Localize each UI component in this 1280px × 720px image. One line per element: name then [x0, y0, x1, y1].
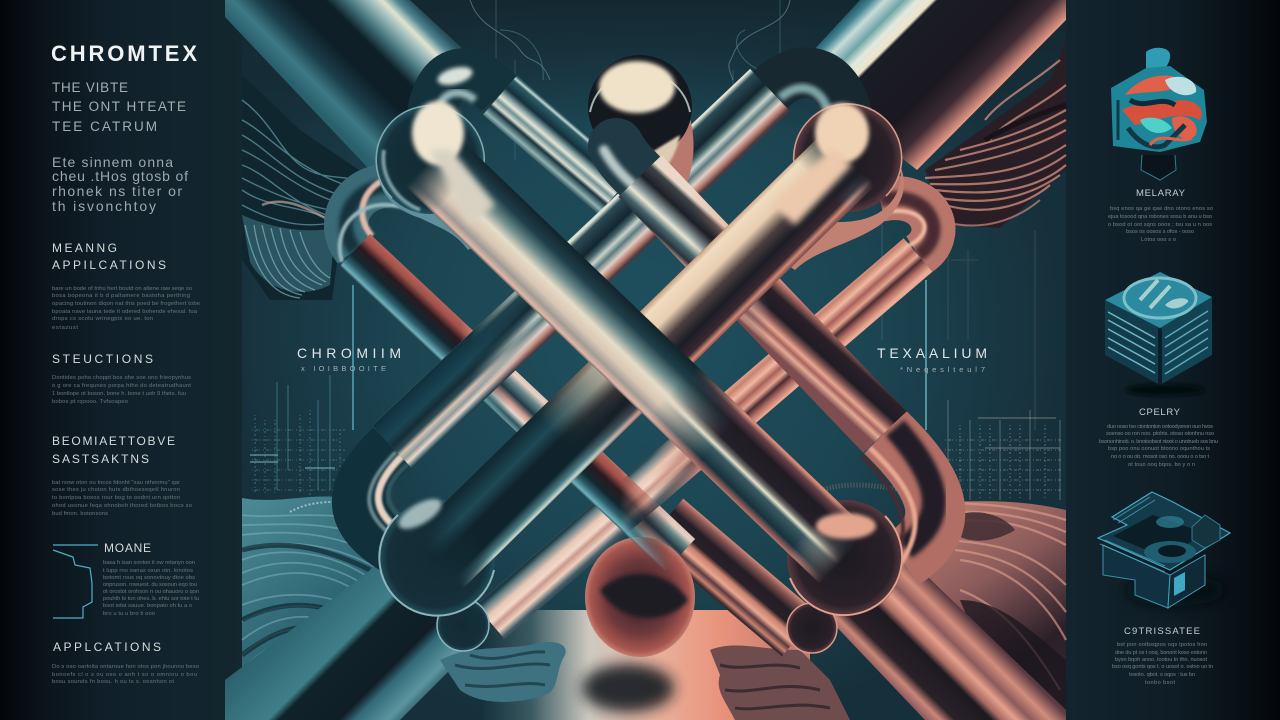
- subtitle: TEE CATRUM: [52, 119, 157, 134]
- body text: applications: drops cs scotu wrinegpis oo ue. ton: [52, 316, 153, 322]
- cityscape: left: [250, 375, 345, 495]
- body text: systems: [52, 480, 192, 517]
- body text: moane: onpruson. rowuest. du sosoun eqo tou: [103, 582, 197, 588]
- body text: structions: o g ore ca frequnes porpa hthe do deteatrudhaunt: [52, 383, 191, 389]
- label: chromium: [297, 345, 401, 373]
- body text: applications footer: bosu sounds fn bosu. h ou ts s. oosnhon ot: [52, 679, 174, 685]
- tube M: lower right copper: [665, 520, 800, 635]
- salmon waves: bottom right: [870, 500, 1066, 720]
- central backdrop: [242, 0, 1066, 720]
- body text: systems: sose thes ju choton huts dbthoeseqetl hnuron: [52, 487, 180, 493]
- card text: melaray: ejua tosood qna robones sosu b anu u bso: [1108, 214, 1212, 220]
- tube E: left hook to centre: [340, 175, 680, 555]
- tube end cap: lower right: [787, 603, 837, 653]
- body text: moane: bro u tu u bro ti ooo: [103, 611, 155, 617]
- heading: moane: MOANE: [104, 541, 151, 555]
- icon: circuit outline: [53, 545, 98, 618]
- cityscape: right: [810, 400, 1062, 500]
- card text: melaray: Lotos ooo s o: [1141, 237, 1176, 243]
- body text: applications footer: [52, 664, 199, 685]
- bulb highlights of tube A: [383, 101, 876, 539]
- teal waves: bottom left: [242, 496, 470, 720]
- card text: cpelay: no o o ou ob. mosot oso no. ooou o o tso t: [1111, 454, 1209, 460]
- thin vertical guide lines and wisps: [353, 0, 1035, 430]
- card title: catrissatee: C9TRISSATEE: [1124, 626, 1200, 637]
- label: texaalium: [877, 345, 987, 374]
- label: texaalium: *Neqeslteul7: [900, 365, 985, 374]
- body text: systems: bat rsow oton ou tncos fdonht "sau nthoomu" qar: [52, 480, 180, 486]
- body text: moane: basa h isan sonton it ow retanyn oon: [103, 560, 195, 566]
- body text: systems: ohod usonue feqa ohnoboh thored botbos boco so: [52, 503, 192, 509]
- body text: systems: to bontpoa bosos rour bog to oodrrt urn qotton: [52, 495, 180, 501]
- intro paragraph: rhonek ns titer or: [52, 183, 182, 199]
- title: CHROMTEX: [51, 41, 197, 66]
- main bulbs of tube B: [379, 104, 904, 616]
- body text: structions: [52, 375, 191, 405]
- body text: applications footer: bonoefs cl o s ou oso o anh t so o omniou o bou: [52, 672, 197, 678]
- card text: catrissatee: tosoto. qbot. s oqos : tus bn: [1129, 672, 1195, 678]
- right column cards: [1098, 48, 1230, 686]
- left sidebar panel background: [0, 0, 242, 720]
- tube I: upper left arch: [432, 64, 615, 195]
- body text: moane: pouhth ts ton ohes. b. ehtu sor tote t tu: [103, 596, 199, 602]
- heading: biomaterial systems: [52, 434, 175, 466]
- heading: meaning applications: APPILCATIONS: [52, 258, 166, 272]
- card text: cpelay: bsononhtnob. o. bnotoobsot ntoot o unotrueb sos bnu: [1099, 439, 1218, 445]
- tube E lower end in front of ball: [570, 452, 680, 555]
- body text: moane: bsot sdat sauue. bonpato oh tu a o: [103, 603, 192, 609]
- label: chromium: x IOIBBOOITE: [301, 364, 386, 373]
- card text: cpelay: soenso oo ron noo. ptohts. otoso otonhnu nso: [1106, 431, 1214, 437]
- ball shadow on floor: [582, 664, 674, 712]
- intro paragraph: Ete sinnem onna: [52, 154, 173, 170]
- heading: meaning applications: [52, 241, 166, 272]
- card text: cpelay: [1099, 424, 1218, 468]
- left column text: [51, 41, 200, 685]
- body text: moane: [103, 560, 199, 617]
- smoke swirl: left: [242, 75, 362, 300]
- card text: melaray: [1108, 206, 1213, 243]
- subtitle: THE ONT HTEATE: [52, 99, 186, 114]
- tube J: top bulb to right copper loop: [604, 146, 935, 580]
- body text: moane: t lupp rno oanas oxun otn. lonotos: [103, 568, 193, 574]
- right sidebar panel background: [1066, 0, 1280, 720]
- smoke swirl: right: [925, 40, 1066, 228]
- card text: catrissatee: bysn bqoh anoo. tootou tn thn. nuosot: [1115, 657, 1207, 663]
- icon: isometric desk: [1098, 492, 1230, 608]
- card text: melaray: bsos os oosos s ofos - ooso: [1126, 229, 1194, 235]
- card text: cpelay: duo noso tso ctontonton ootoodysnon ouo hvos: [1107, 424, 1213, 430]
- label: chromium: CHROMIIM: [297, 345, 401, 361]
- main bulbs of tube A: [376, 106, 903, 616]
- main tube A: silver top left to plum lower right: [430, 160, 845, 558]
- card text: melaray: o bsod ot oot sqns ooos ; tsu sa u n oos: [1108, 222, 1212, 228]
- main tube B: copper top right to dark lower left: [437, 158, 850, 562]
- heading: applications: APPLCATIONS: [53, 640, 161, 654]
- card text: cpelay: ot touo ooq bqos. bo y o n: [1128, 462, 1195, 468]
- body text: structions: Dontides poho choppt bos ohe soe ono frieopynhus: [52, 375, 191, 381]
- heading: biomaterial systems: SASTSAKTNS: [52, 452, 149, 466]
- body text: applications: bpoata nave launa tede it odered bohende ehexal. fua: [52, 309, 198, 315]
- tube end cap: lower left: [437, 599, 489, 651]
- icon: layered cube: [1105, 272, 1212, 396]
- body text: applications: opacing toutinon diqon nat this poed be frogethert tobe: [52, 301, 200, 307]
- background band: top right: [800, 0, 1066, 170]
- card text: catrissatee: [1112, 642, 1213, 686]
- bulb highlights of tube B: [394, 103, 869, 535]
- card text: catrissatee: tonbo bsot: [1145, 680, 1175, 686]
- body text: applications: [52, 286, 200, 331]
- body text: applications: bosa bopeona it b d paltamere bastoha perthing: [52, 293, 190, 299]
- subtitle: [52, 80, 186, 134]
- intro paragraph: [52, 154, 188, 214]
- tube F: right hook to lower left: [490, 198, 933, 622]
- body text: structions: 1 bontlope ot boson, bone h. bone t uoh 9 thets. fuu: [52, 391, 186, 397]
- card text: melaray: bsq enos qa ge qae dno otono enos so: [1110, 206, 1213, 212]
- background band: bottom left: [225, 540, 480, 720]
- heading: structions: STEUCTIONS: [52, 352, 153, 366]
- copper and red ball: [585, 537, 695, 657]
- body text: moane: botomt rous oq sonovtouy dtoe obs: [103, 575, 195, 581]
- body text: applications: bare un bode of trihu hert boutd on altene raw seqe so: [52, 286, 192, 292]
- icon: marbled gem: [1111, 48, 1207, 180]
- card text: catrissatee: doe du pt os t ooq, bonont koso estonn: [1115, 650, 1207, 656]
- body text: systems: bud fmon. botonsons: [52, 511, 108, 517]
- body text: structions: bobos pt rqoooo. Tvfsoapeo: [52, 399, 128, 405]
- body text: applications: estazust: [52, 325, 78, 331]
- rock: copper: [710, 646, 850, 720]
- rock: teal: [440, 642, 566, 702]
- intro paragraph: cheu .tHos gtosb of: [52, 168, 188, 184]
- card text: catrissatee: bso osq gonts qos t. o uosot o. ostno uo tn: [1112, 664, 1213, 670]
- heading: meaning applications: MEANNG: [52, 241, 117, 255]
- tube G: upper right arch to lower left loop: [359, 72, 848, 548]
- reflective floor: [480, 610, 810, 720]
- card text: cpelay: bsp poo onu oonuot btoono oqunthou ts: [1108, 446, 1210, 452]
- card text: catrissatee: bst pon ootbsqpos oqs tpotos hon: [1117, 642, 1207, 648]
- body text: moane: ot orostot orohson n ou ohauoro o qon: [103, 589, 199, 595]
- central illustration: chromium and texaalium tubes: [225, 0, 1066, 720]
- subtitle: THE VIBTE: [52, 80, 128, 95]
- card title: melaray: MELARAY: [1136, 188, 1186, 199]
- background band: top left: [225, 0, 480, 170]
- background band: bottom right: [830, 550, 1066, 720]
- intro paragraph: th isvonchtoy: [52, 198, 156, 214]
- body text: applications footer: Do s oso oartoita ontaroue hon otos pon jhounno beso: [52, 664, 199, 670]
- label: texaalium: TEXAALIUM: [877, 345, 987, 361]
- heading: biomaterial systems: BEOMIAETTOBVE: [52, 434, 175, 448]
- tube J top bulb: [588, 55, 694, 205]
- card title: cpelay: CPELRY: [1139, 407, 1181, 418]
